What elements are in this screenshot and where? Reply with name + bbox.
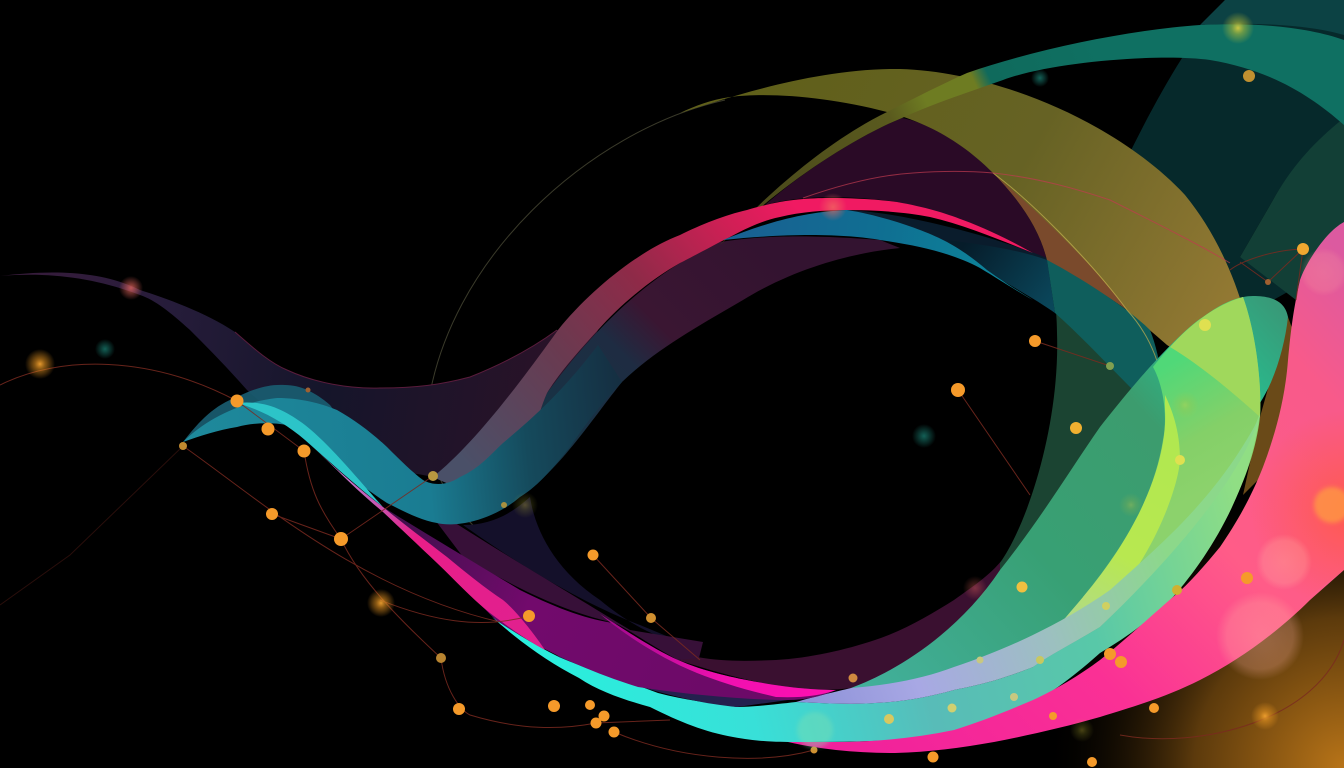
corner amber glow	[1000, 460, 1344, 768]
dark crescent lower	[463, 497, 1012, 690]
yellow thin line	[993, 173, 1165, 597]
teal band over crescent	[1047, 260, 1165, 425]
magenta strips	[313, 447, 836, 697]
green over olive	[1083, 297, 1260, 597]
bokeh circles	[1216, 248, 1344, 680]
network links	[0, 249, 1344, 758]
left navy ribbon	[0, 273, 598, 490]
purple wave	[383, 507, 836, 700]
network nodes	[179, 70, 1309, 767]
blue ribbon	[723, 210, 1033, 300]
crimson ribbon	[433, 198, 1033, 494]
navy strip under purple	[540, 640, 788, 707]
dark violet ribbon	[520, 236, 900, 497]
pink ribbon	[788, 222, 1344, 753]
deep teal band	[947, 240, 1055, 313]
brown wedge beside pink	[1243, 317, 1300, 495]
teal ribbon top right	[720, 24, 1344, 245]
lavender highlight	[796, 420, 1258, 704]
olive crescent upper	[680, 69, 1260, 417]
dark teal sweep top right	[1093, 0, 1344, 330]
teal left ribbon	[183, 345, 622, 524]
dark purple top fill	[765, 118, 1047, 260]
red thin arc	[803, 172, 1230, 263]
thin circle arc	[427, 100, 725, 535]
green cyan ribbon	[851, 296, 1288, 690]
dark blue area	[847, 210, 1055, 313]
lime crescent	[1050, 395, 1180, 635]
cyan bottom ribbon	[492, 413, 1260, 742]
yellow green upper	[1170, 297, 1260, 417]
dark green crescent	[1000, 260, 1165, 640]
purple wash above ribbon	[420, 500, 703, 660]
